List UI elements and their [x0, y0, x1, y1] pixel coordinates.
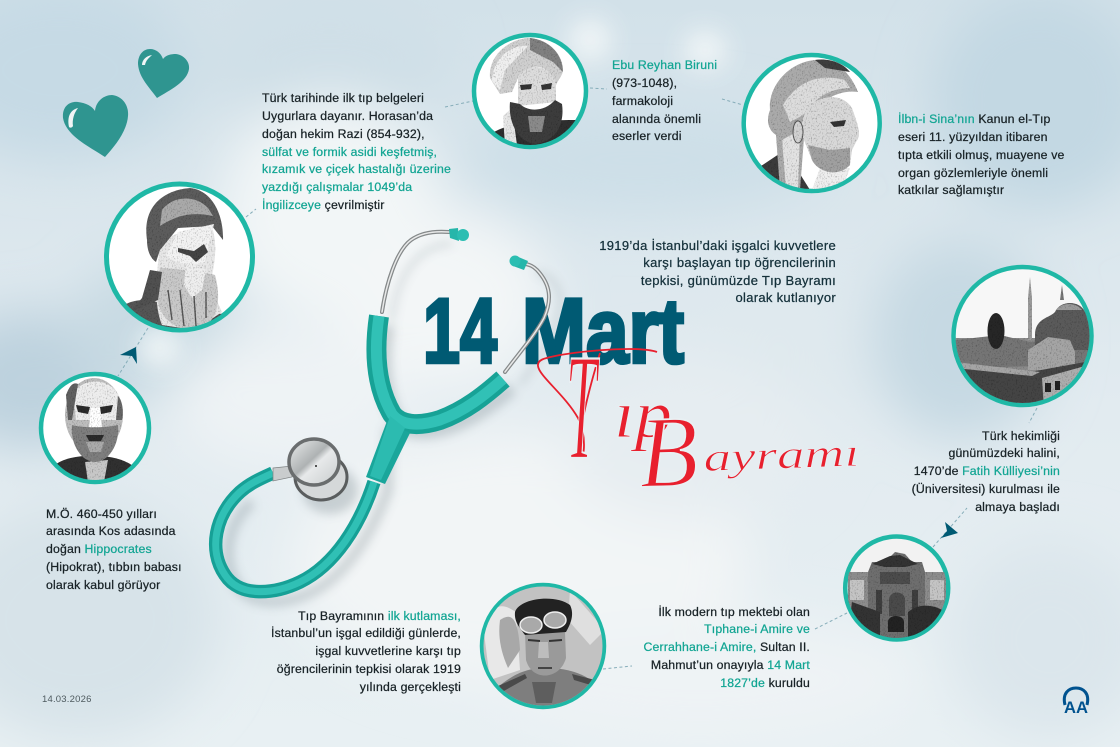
script title: Tıp Bayramı: ayramı	[703, 430, 860, 480]
arrow: toward school	[941, 522, 958, 538]
stethoscope shadow	[228, 244, 560, 602]
text: first celebration: işgal kuvvetlerine karşı tıp	[315, 644, 461, 658]
text: Razi: yazdığı çalışmalar 1049’da	[262, 180, 412, 194]
text: Razi: doğan hekim Razi (854-932),	[262, 127, 425, 141]
title: 14 Mart: 14	[423, 280, 497, 382]
hearts	[63, 49, 189, 157]
logo: AA	[1064, 688, 1088, 717]
title: 14 Mart: Mart	[522, 280, 684, 382]
icon: small heart	[138, 49, 189, 98]
text: Ibn Sina: organ gözlemleriyle önemli	[898, 166, 1048, 180]
chest piece	[273, 439, 347, 500]
text: Biruni	[612, 58, 717, 143]
text: Ibn Sina: eseri 11. yüzyıldan itibaren	[898, 130, 1048, 144]
text: Biruni: farmakoloji	[612, 94, 673, 108]
text: 1919 student reaction: tepkisi, günümüzde Tıp Bayramı	[641, 273, 836, 288]
left ear tube	[382, 232, 449, 312]
text: first modern school: Mahmut’un onayıyla 14 Mart	[651, 658, 810, 672]
stethoscope	[216, 228, 560, 602]
text: Razi	[262, 91, 451, 212]
text: Fatih Külliyesi: günümüzdeki halini,	[948, 446, 1060, 460]
text: Fatih Külliyesi: almaya başladı	[975, 500, 1060, 514]
script title: Tıp Bayramı: ıp	[614, 376, 672, 452]
icon: large heart	[63, 95, 128, 157]
script title: Tıp Bayramı	[538, 322, 860, 510]
text: first celebration	[271, 608, 461, 694]
connector lines	[118, 88, 1037, 669]
portrait: Ibn Sina	[744, 55, 880, 195]
text: Hippocrates: (Hipokrat), tıbbın babası	[46, 560, 182, 574]
photo: Fatih Külliyesi	[950, 267, 1100, 410]
text: first modern school: Cerrahhane-i Amire, Sultan II.	[644, 640, 810, 654]
right ear tip	[510, 256, 528, 270]
left ear tip	[449, 228, 469, 241]
text: Fatih Külliyesi: Türk hekimliği	[982, 428, 1060, 442]
photo: Tıphane-i Amire building	[845, 536, 948, 642]
text: Fatih Külliyesi: (Üniversitesi) kurulması ile	[912, 482, 1060, 496]
text: first celebration: Tıp Bayramının ilk kutlaması,	[298, 608, 461, 622]
text: first celebration: İstanbul’un işgal edildiği günlerde,	[271, 626, 461, 640]
main tubing Y piece	[216, 316, 503, 592]
text: Razi: kızamık ve çiçek hastalığı üzerine	[262, 162, 451, 176]
text: Hippocrates: arasında Kos adasında	[46, 524, 176, 538]
text: Hippocrates: olarak kabul görüyor	[46, 578, 160, 592]
script title: Tıp Bayramı: T	[566, 322, 600, 491]
title: 14 Mart	[423, 280, 684, 382]
text: 1919 student reaction: olarak kutlanıyor	[736, 290, 836, 305]
text: 1919 student reaction: karşı başlayan tıp öğrencilerinin	[643, 255, 836, 270]
text: Fatih Külliyesi	[912, 428, 1060, 514]
text: 1919 student reaction	[599, 238, 836, 305]
text: first modern school	[644, 604, 810, 690]
photo: medical student	[480, 580, 610, 710]
text: first modern school: 1827’de kuruldu	[720, 676, 810, 690]
text: first modern school: Tıphane-i Amire ve	[704, 622, 810, 636]
text: Ibn Sina: İlbn-i Sina’nın Kanun el-Tıp	[898, 112, 1051, 126]
text: Hippocrates: doğan Hippocrates	[46, 542, 152, 556]
text: Biruni: eserler verdi	[612, 129, 682, 143]
text: Hippocrates: M.Ö. 460-450 yılları	[46, 506, 157, 520]
script title: Tıp Bayramı: B	[637, 394, 700, 510]
text: Biruni: Ebu Reyhan Biruni	[612, 58, 717, 72]
portrait: Razi	[106, 184, 252, 340]
portrait: Hippocrates	[41, 374, 149, 490]
text: Hippocrates	[46, 506, 182, 592]
text: Biruni: alanında önemli	[612, 112, 701, 126]
date: 14.03.2026	[42, 694, 92, 705]
portrait: Biruni	[474, 35, 590, 150]
text: Razi: Türk tarihinde ilk tıp belgeleri	[262, 91, 424, 105]
text: Ibn Sina: katkılar sağlamıştır	[898, 183, 1004, 197]
text: Ibn Sina: tıpta etkili olmuş, muayene ve	[898, 148, 1064, 162]
text: Biruni: (973-1048),	[612, 76, 677, 90]
text: first celebration: yılında gerçekleşti	[360, 680, 461, 694]
text: first celebration: öğrencilerinin tepkisi olarak 1919	[277, 662, 461, 676]
text: 1919 student reaction: 1919’da İstanbul’daki işgalci kuvvetlere	[599, 238, 836, 253]
text: Razi: Uygurlara dayanır. Horasan’da	[262, 109, 433, 123]
arrow: toward Razi	[120, 347, 137, 364]
text: Fatih Külliyesi: 1470’de Fatih Külliyesi’nin	[914, 464, 1060, 478]
right ear tube	[505, 264, 549, 372]
text: Razi: sülfat ve formik asidi keşfetmiş,	[262, 145, 437, 159]
swash of the script T	[538, 349, 657, 458]
text: Ibn Sina	[898, 112, 1064, 197]
logo: AA: AA	[1064, 698, 1088, 717]
text: Razi: İngilizceye çevrilmiştir	[262, 198, 385, 212]
text: first modern school: İlk modern tıp mektebi olan	[658, 604, 810, 618]
